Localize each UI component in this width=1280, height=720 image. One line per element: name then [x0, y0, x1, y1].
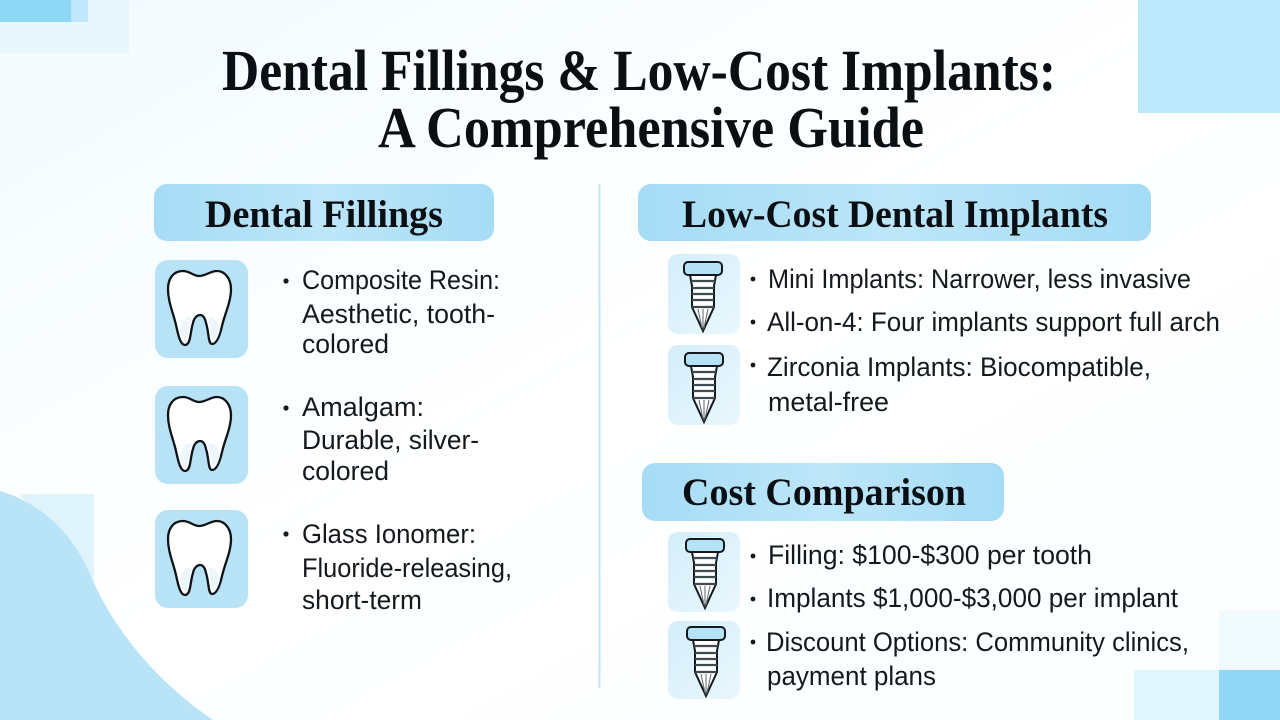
title — [222, 38, 1056, 160]
text: all-on-4: All-on-4: Four implants support full arch — [767, 307, 1220, 337]
centre divider — [598, 184, 600, 688]
heading: dental fillings: Dental Fillings — [205, 193, 443, 236]
title: Dental Fillings & Low-Cost Implants: — [222, 38, 1056, 103]
icon: tooth amalgam — [155, 386, 248, 484]
text: zirconia implants — [751, 352, 1151, 417]
text: glass ionomer: Fluoride-releasing, — [302, 553, 512, 583]
text: composite resin: Composite Resin: — [302, 265, 500, 295]
decoration: top-left corner blocks — [0, 0, 129, 53]
text: zirconia implants: Zirconia Implants: Biocompatible, — [767, 352, 1151, 382]
text: discount options: Discount Options: Community clinics, — [766, 627, 1189, 657]
panel: dental fillings — [154, 184, 512, 615]
text: composite resin: Aesthetic, tooth- — [302, 299, 495, 329]
text: amalgam: Durable, silver- — [302, 425, 479, 455]
text: zirconia implants: metal-free — [768, 387, 889, 417]
text: amalgam — [283, 392, 479, 486]
panel: cost comparison — [642, 463, 1189, 699]
text: discount options — [751, 627, 1189, 691]
icon: implant mini — [668, 254, 740, 334]
icon: implant filling cost — [668, 532, 740, 612]
text: implant cost: Implants $1,000-$3,000 per implant — [767, 583, 1178, 613]
heading: dental fillings — [154, 184, 494, 241]
icon: implant discount — [668, 621, 740, 699]
icon: tooth glass ionomer — [155, 510, 248, 608]
text: discount options: payment plans — [767, 661, 936, 691]
text: composite resin: colored — [302, 329, 389, 359]
heading: cost comparison: Cost Comparison — [682, 471, 966, 514]
icon: tooth composite — [155, 260, 248, 358]
decoration: top-right block — [1138, 0, 1280, 113]
text: glass ionomer — [283, 519, 512, 615]
text: composite resin — [283, 265, 500, 359]
decoration: bottom-left wave — [0, 491, 213, 720]
text: glass ionomer: Glass Ionomer: — [302, 519, 476, 549]
heading: low-cost dental implants — [638, 184, 1151, 241]
heading: cost comparison — [642, 463, 1004, 521]
title: A Comprehensive Guide — [378, 95, 924, 160]
text: amalgam: Amalgam: — [302, 392, 424, 422]
text: glass ionomer: short-term — [302, 585, 422, 615]
text: mini implants: Mini Implants: Narrower, less invasive — [768, 264, 1191, 294]
icon: implant zirconia — [668, 345, 740, 425]
text: amalgam: colored — [302, 456, 389, 486]
panel: low-cost dental implants — [638, 184, 1220, 425]
decoration: bottom-right blocks — [1134, 610, 1280, 720]
text: filling cost: Filling: $100-$300 per tooth — [768, 540, 1092, 570]
heading: low-cost dental implants: Low-Cost Dental Implants — [682, 193, 1108, 236]
